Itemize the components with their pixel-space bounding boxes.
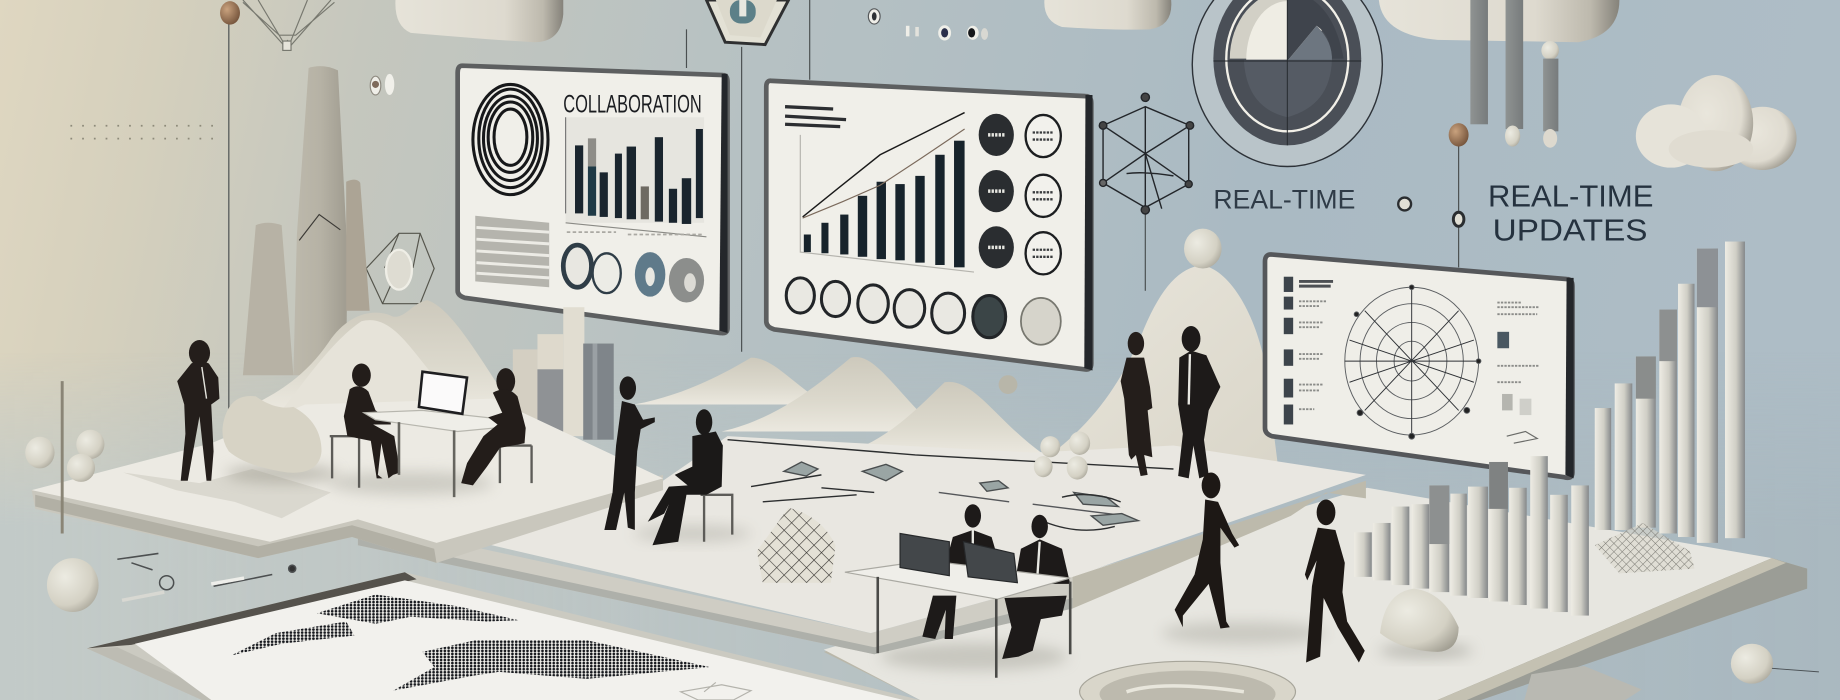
walking man [1305,499,1365,662]
sketch on left platform [123,469,331,518]
header lines [785,107,846,127]
label: real-time updates [1488,179,1653,247]
bar chart [566,117,706,237]
icon: brass ball and small nodes [1398,123,1469,226]
right list [1497,303,1540,443]
panel: collaboration screen [458,66,728,333]
platform: left [32,399,663,563]
chair left [330,436,366,488]
ring icons [563,245,704,303]
person right torso [1002,515,1070,659]
person standing left [177,340,219,481]
radar chart [1345,285,1481,439]
desk [845,560,1070,599]
left list [1284,277,1333,424]
person left torso [922,504,997,639]
laptop left [900,534,949,576]
round icon column [979,114,1061,274]
small tools on floor [117,553,296,600]
wire mesh sculpture [1595,523,1694,573]
line and bar chart [800,113,974,272]
bottom desk group [845,504,1070,678]
striped table [475,216,549,287]
cloud: top right [1379,0,1619,42]
panel: performance screen [766,81,1092,371]
hills left [241,300,510,410]
hill right with sphere [999,229,1279,483]
stone lump left [222,396,338,483]
woven net sculpture [757,508,836,583]
label: real-time: REAL-TIME [1213,185,1355,215]
person seated left [344,363,400,478]
person gesturing [604,376,655,530]
stone boulder [1379,589,1473,658]
laptop right [963,542,1017,583]
cloud: top middle [1044,0,1171,30]
map tray [87,572,920,700]
person seated right [461,368,526,485]
hanging bars [1470,0,1559,148]
two standing people [1121,326,1220,478]
stems and balls left [25,381,104,612]
woman [1121,332,1152,476]
small pins top [370,9,988,95]
cloud: right [1636,75,1797,171]
ceramic bowl [1080,661,1296,700]
heading: collaboration: COLLABORATION [563,92,702,119]
tiny dotted lines left [70,125,213,140]
donut chart [1192,0,1382,166]
concentric rings [473,84,548,195]
towers [243,66,370,375]
walking woman [1175,473,1239,628]
label: real-time updates: UPDATES [1493,213,1648,247]
icon: wire polyhedron [243,0,334,50]
icon: network polyhedron [1099,93,1194,214]
left table group [330,363,532,497]
world map dots [231,594,710,691]
front bar chart [1354,456,1589,616]
platform: centre [358,436,1366,654]
thin hanging wires [229,0,1459,410]
table [364,410,507,431]
laptop [419,372,467,414]
floating spheres [1034,431,1090,480]
panel: radar screen [1265,254,1574,478]
hills centre [634,357,1044,455]
back bar chart [1595,242,1745,543]
icon: brass ball pin [220,1,240,25]
man [1178,326,1220,478]
icon: glass hexagon [366,233,434,304]
bottom ring icons [786,278,1061,345]
small pebble bottom right [1731,644,1819,684]
platform: right lower [824,488,1807,700]
icon: top hexagon badge [706,0,789,45]
cloud: top left [395,0,563,42]
seated person with chair [648,409,733,545]
plan drawing on centre platform [728,440,1173,530]
label: real-time updates: REAL-TIME [1488,179,1653,213]
block cluster [513,307,614,440]
chair right [495,446,532,483]
